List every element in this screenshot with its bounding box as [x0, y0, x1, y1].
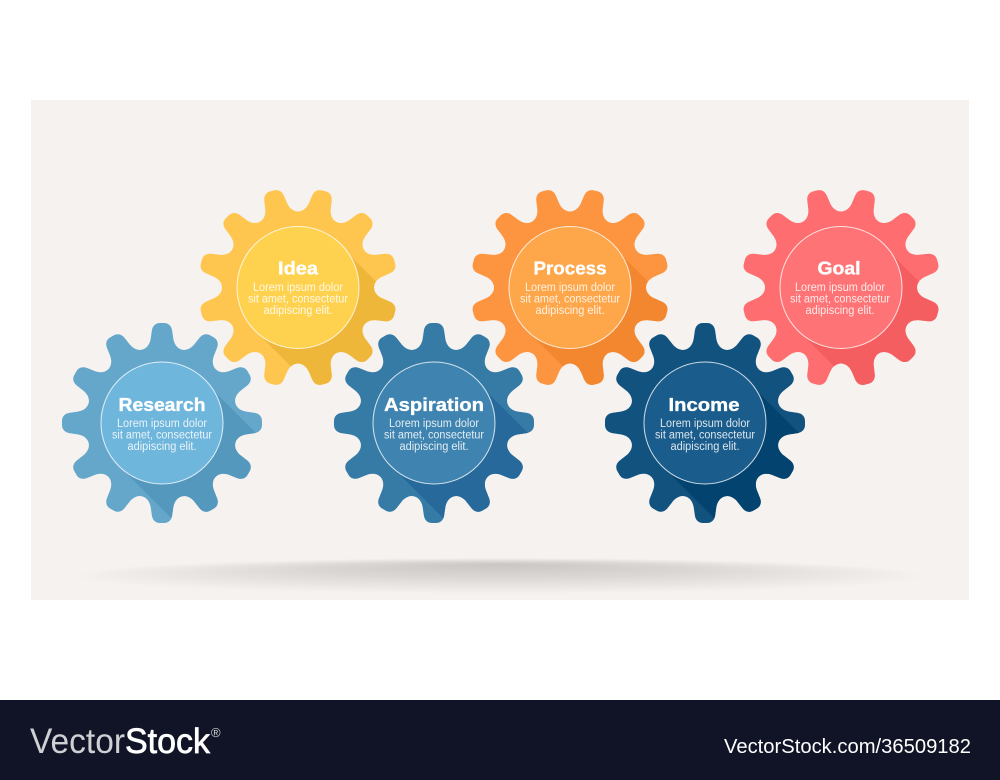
inner circle: Goal — [780, 226, 902, 348]
text block: Aspiration: adipiscing elit. — [400, 441, 468, 453]
gear body: Goal — [740, 186, 942, 388]
text block: Aspiration — [384, 418, 484, 453]
inner circle: Process — [509, 226, 631, 348]
gear: Process — [469, 186, 671, 388]
text block: Income — [655, 418, 755, 453]
text block: Research: adipiscing elit. — [128, 441, 196, 453]
footer logo — [30, 722, 221, 761]
heading: Research: Research — [118, 394, 206, 415]
text block: Income: sit amet, consectetur — [655, 430, 755, 442]
text block: Process: adipiscing elit. — [536, 305, 604, 317]
footer logo: ® — [211, 725, 221, 740]
heading: Process: Process — [534, 258, 606, 278]
text block: Income: Lorem ipsum dolor — [660, 418, 750, 430]
heading: Idea: Idea — [278, 258, 319, 278]
text block: Goal: adipiscing elit. — [806, 305, 874, 317]
text block: Aspiration: Lorem ipsum dolor — [389, 418, 479, 430]
gear body: Research — [61, 322, 263, 524]
gear: Income — [604, 322, 806, 524]
text block: Process: Lorem ipsum dolor — [525, 282, 615, 294]
text block: Income: adipiscing elit. — [670, 441, 740, 453]
text block: Idea: Lorem ipsum dolor — [253, 282, 343, 294]
heading: Aspiration: Aspiration — [384, 394, 484, 415]
text block: Research: sit amet, consectetur — [112, 430, 212, 442]
text block: Research — [112, 418, 212, 453]
inner circle: Income — [644, 362, 766, 484]
panel: background — [31, 100, 969, 600]
inner circle: Idea — [237, 226, 359, 348]
gear body: Income — [604, 322, 806, 524]
text block: Idea — [248, 282, 348, 317]
text block: Research: Lorem ipsum dolor — [117, 418, 207, 430]
text block: Goal: Lorem ipsum dolor — [795, 282, 885, 294]
gear: Aspiration — [333, 322, 535, 524]
text block: Process: sit amet, consectetur — [520, 294, 620, 306]
footer image id: VectorStock.com/36509182 — [724, 736, 971, 758]
text block: Idea: sit amet, consectetur — [248, 294, 348, 306]
text block: Goal: sit amet, consectetur — [790, 294, 890, 306]
footer logo: Stock — [125, 722, 210, 761]
heading: Income: Income — [668, 394, 740, 415]
text block: Idea: adipiscing elit. — [264, 305, 332, 317]
gear body: Process — [469, 186, 671, 388]
text block: Aspiration: sit amet, consectetur — [384, 430, 484, 442]
inner circle: Research — [101, 362, 223, 484]
gear: Goal — [740, 186, 942, 388]
gear: Research — [61, 322, 263, 524]
ground shadow — [68, 558, 932, 594]
heading: Goal: Goal — [818, 258, 860, 278]
footer bar — [0, 700, 1000, 780]
footer logo: Vector — [30, 722, 125, 761]
text block: Goal — [790, 282, 890, 317]
gear body: Idea — [197, 186, 399, 388]
inner circle: Aspiration — [373, 362, 495, 484]
gear: Idea — [197, 186, 399, 388]
text block: Process — [520, 282, 620, 317]
gear body: Aspiration — [333, 322, 535, 524]
